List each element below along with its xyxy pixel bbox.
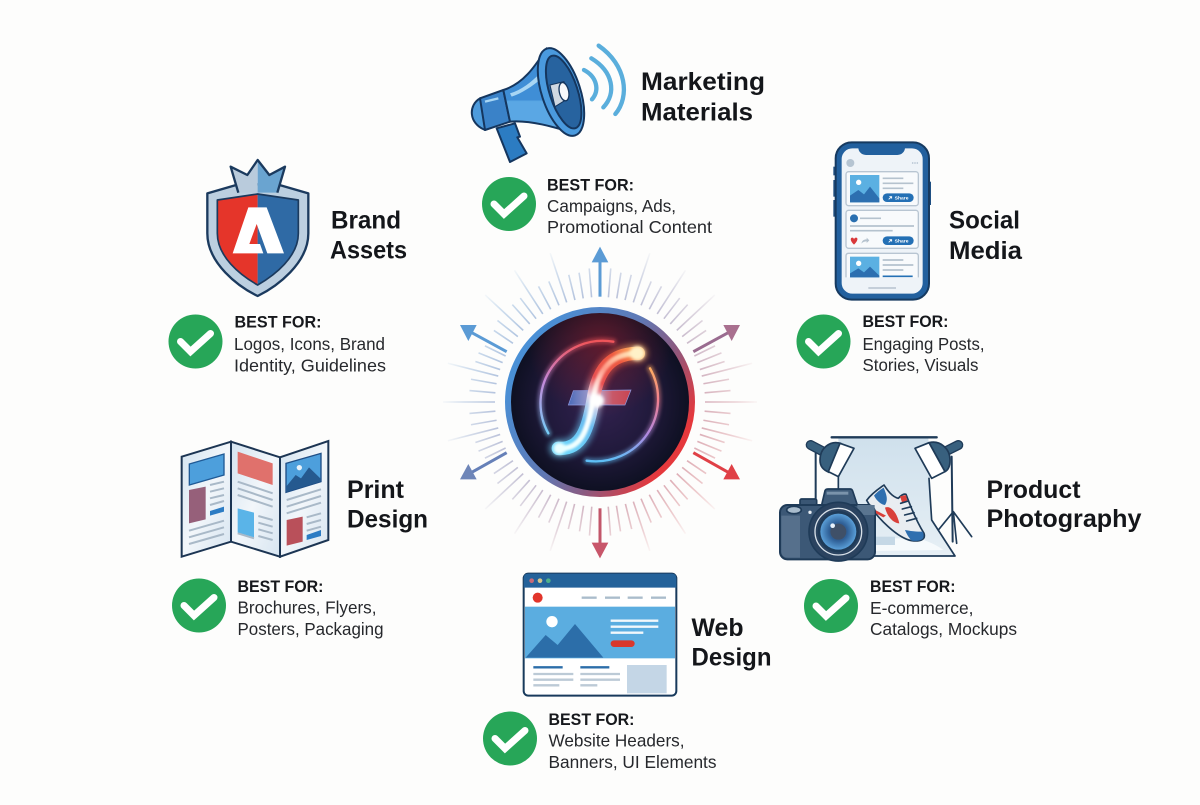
panel: marketing materials — [472, 43, 765, 237]
title: print design: Design — [347, 506, 428, 534]
best for text: Engaging Posts, — [862, 334, 984, 354]
title: brand assets: Assets — [330, 236, 407, 264]
panel: product photography — [780, 437, 1142, 639]
best for text — [870, 577, 1017, 639]
title: social media — [949, 206, 1023, 265]
best for text: Catalogs, Mockups — [870, 619, 1017, 639]
icon: shield with crown — [207, 160, 308, 296]
title: product photography: Photography — [986, 505, 1142, 533]
icon: smartphone: Share — [895, 195, 909, 201]
icon: camera and studio — [780, 437, 972, 561]
panel: web design — [483, 574, 772, 772]
best for text: Stories, Visuals — [862, 355, 979, 375]
title: product photography — [986, 476, 1142, 533]
check badge — [482, 177, 536, 231]
title: social media: Media — [949, 237, 1023, 265]
best for text: Brochures, Flyers, — [238, 598, 376, 618]
check badge — [796, 314, 850, 368]
icon: megaphone — [472, 43, 624, 162]
title: marketing materials — [641, 68, 765, 126]
icon: browser window — [524, 574, 676, 696]
icon: smartphone: Share — [895, 238, 909, 244]
best for text: Banners, UI Elements — [548, 752, 717, 772]
best for text — [238, 577, 384, 639]
title: web design — [692, 614, 772, 672]
best for text — [862, 312, 984, 375]
title: marketing materials: Materials — [641, 98, 753, 126]
best for text — [234, 312, 386, 376]
best for text: BEST FOR: — [870, 577, 956, 596]
arrow: upper left — [460, 325, 507, 352]
arrow: lower left — [460, 453, 507, 479]
title: web design: Design — [692, 644, 772, 672]
best for text — [547, 176, 712, 237]
check badge — [483, 712, 537, 766]
best for text: Website Headers, — [548, 730, 684, 750]
best for text: BEST FOR: — [238, 577, 324, 596]
best for text: E-commerce, — [870, 598, 974, 618]
radiating rays — [443, 253, 757, 551]
best for text: Logos, Icons, Brand — [234, 334, 385, 354]
best for text: Campaigns, Ads, — [547, 196, 676, 216]
arrow: upper right — [693, 325, 740, 352]
arrow: down — [592, 508, 608, 558]
check badge — [804, 579, 858, 633]
best for text: BEST FOR: — [234, 312, 322, 332]
best for text: Identity, Guidelines — [234, 356, 386, 376]
icon: smartphone — [833, 142, 931, 300]
title: product photography: Product — [986, 476, 1081, 504]
title: social media: Social — [949, 206, 1020, 234]
arrow: lower right — [693, 453, 740, 479]
arrow: up — [592, 247, 608, 297]
best for text — [548, 710, 717, 772]
best for text: Promotional Content — [547, 217, 712, 237]
panel: print design — [172, 441, 428, 639]
best for text: BEST FOR: — [547, 176, 634, 194]
check badge — [168, 314, 222, 368]
central hub: logo with radiating rays and arrows — [443, 246, 757, 558]
title: print design: Print — [347, 476, 405, 504]
title: brand assets — [330, 206, 407, 264]
best for text: Posters, Packaging — [238, 619, 384, 639]
title: marketing materials: Marketing — [641, 68, 765, 96]
best for text: BEST FOR: — [548, 710, 634, 729]
icon: folded brochure — [182, 441, 328, 557]
panel: brand assets — [168, 160, 407, 376]
check badge — [172, 578, 226, 632]
title: print design — [347, 476, 428, 534]
best for text: BEST FOR: — [862, 312, 948, 331]
title: web design: Web — [692, 614, 744, 642]
logo badge — [508, 310, 692, 494]
title: brand assets: Brand — [331, 206, 401, 234]
panel: social media — [796, 142, 1023, 375]
